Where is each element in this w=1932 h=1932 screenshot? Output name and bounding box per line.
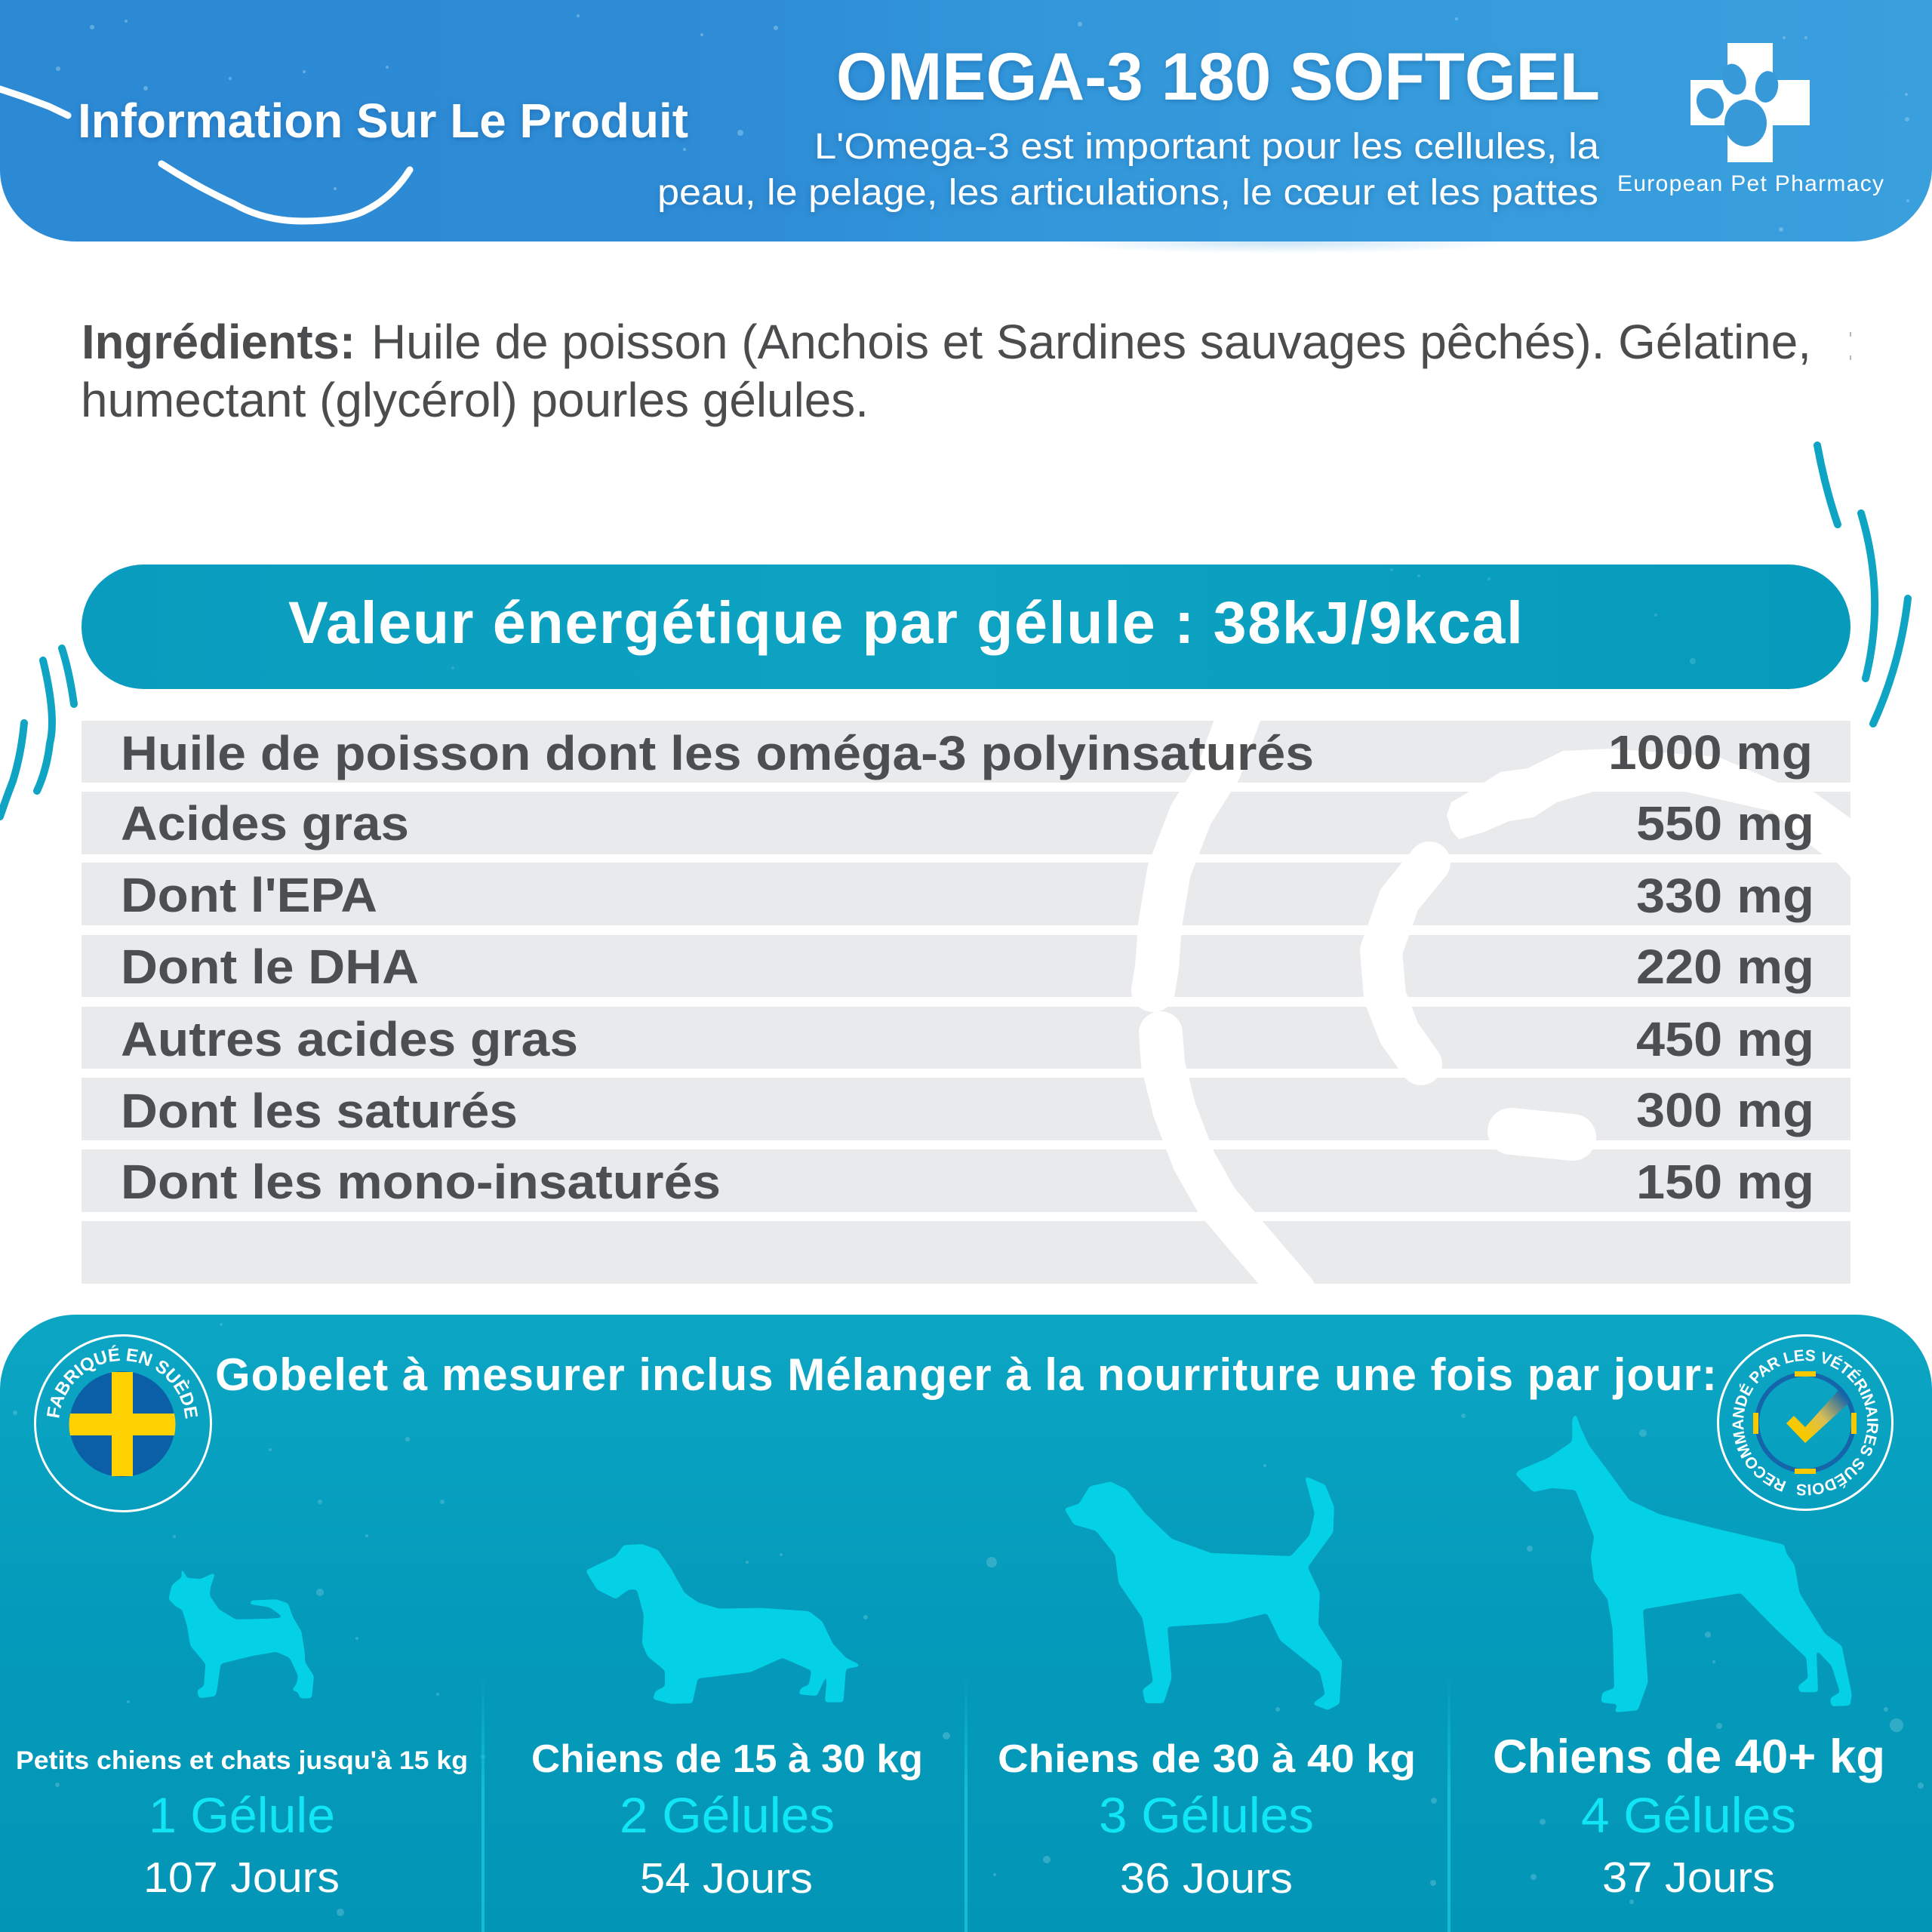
panel: dosage [0, 1315, 1932, 1932]
dose: 4 capsules: 4 Gélules [1581, 1787, 1796, 1843]
label: 15 to 30 kg: Chiens de 15 à 30 kg [531, 1737, 923, 1781]
row: saturated: 300 mg [1636, 1083, 1814, 1137]
label: over 40 kg: Chiens de 40+ kg [1493, 1730, 1885, 1783]
subtitle text block [657, 127, 1599, 213]
badge: recommended by vets: RECOMMANDÉ PAR LES VÉTÉRINAIRES SUÉDOIS [1733, 1349, 1878, 1496]
column: over 40 kg [1493, 1414, 1885, 1902]
row: fatty acids: 550 mg [1636, 796, 1814, 851]
dividers [481, 1675, 1451, 1932]
subtitle text block: peau, le pelage, les articulations, le cœur et les pattes [657, 173, 1598, 213]
row: other fatty acids: 450 mg [1636, 1012, 1814, 1066]
text block: ingredients: humectant (glycérol) pourles gélules. [81, 373, 869, 427]
row: other fatty acids: Autres acides gras [121, 1012, 578, 1066]
icon: doberman dog [1515, 1414, 1852, 1712]
decorative white swoosh: left [0, 89, 68, 115]
row: DHA: Dont le DHA [121, 940, 419, 994]
panel: header banner [0, 0, 1932, 254]
dose: 2 capsules: 2 Gélules [620, 1787, 835, 1843]
row: fish oil: 1000 mg [1608, 725, 1813, 780]
row: EPA: 330 mg [1636, 869, 1814, 923]
row: mono-unsaturated: Dont les mono-insaturés [121, 1155, 721, 1209]
row: other fatty acids [121, 1012, 1814, 1066]
title: OMEGA-3 180 SOFTGEL [836, 38, 1600, 114]
text block: ingredients [81, 315, 1851, 427]
icon: hound dog [1064, 1476, 1342, 1710]
white paw brush strokes over table [1153, 698, 1872, 1292]
duration: 36 days: 36 Jours [1120, 1854, 1293, 1903]
energy value pill [82, 565, 1850, 689]
heading: product information: Information Sur Le Produit [78, 94, 688, 148]
row: fatty acids [121, 796, 1814, 851]
row: fish oil: Huile de poisson dont les oméga-3 polyinsaturés [121, 726, 1314, 780]
decorative teal swooshes: left [0, 648, 74, 817]
label: 30 to 40 kg: Chiens de 30 à 40 kg [998, 1737, 1416, 1781]
icon: terrier dog [586, 1544, 862, 1704]
badge: made in Sweden [34, 1334, 212, 1512]
duration: 54 days: 54 Jours [640, 1854, 813, 1903]
row: DHA [121, 940, 1814, 994]
row: fatty acids: Acides gras [121, 796, 409, 851]
column: 30 to 40 kg [998, 1476, 1416, 1903]
text block: ingredients: Ingrédients: [82, 315, 355, 369]
column: 15 to 30 kg [531, 1544, 923, 1903]
text block: ingredients: Huile de poisson (Anchois et Sardines sauvages pêchés). Gélatine, [371, 315, 1811, 369]
decorative white swoosh: smile [162, 164, 410, 221]
heading: measuring cup: Gobelet à mesurer inclus Mélanger à la nourriture une fois par jour: [215, 1349, 1717, 1400]
row: fish oil [121, 725, 1813, 780]
decorative teal swooshes: right [1817, 445, 1908, 724]
icon: small dog [168, 1565, 314, 1698]
dose: 1 capsule: 1 Gélule [149, 1787, 335, 1843]
column: small dogs [16, 1565, 468, 1902]
subtitle text block: L'Omega-3 est important pour les cellules, la [814, 127, 1599, 167]
row: DHA: 220 mg [1636, 940, 1814, 994]
duration: 107 days: 107 Jours [143, 1854, 340, 1902]
energy value text: Valeur énergétique par gélule : 38kJ/9kcal [288, 589, 1523, 656]
row: saturated [121, 1083, 1814, 1138]
row: saturated: Dont les saturés [121, 1084, 518, 1138]
badge: made in Sweden: FABRIQUÉ EN SUÈDE [47, 1345, 198, 1419]
logo name: European Pet Pharmacy [1617, 171, 1884, 196]
nutrition table [82, 698, 1872, 1292]
row: EPA: Dont l'EPA [121, 868, 377, 922]
row: mono-unsaturated: 150 mg [1636, 1155, 1814, 1209]
duration: 37 days: 37 Jours [1602, 1854, 1775, 1902]
icon: paw cross logo [1690, 43, 1810, 162]
dose: 3 capsules: 3 Gélules [1099, 1787, 1314, 1843]
row: EPA [121, 868, 1814, 923]
label: small dogs: Petits chiens et chats jusqu'à 15 kg [16, 1746, 468, 1775]
row: mono-unsaturated [121, 1155, 1814, 1209]
